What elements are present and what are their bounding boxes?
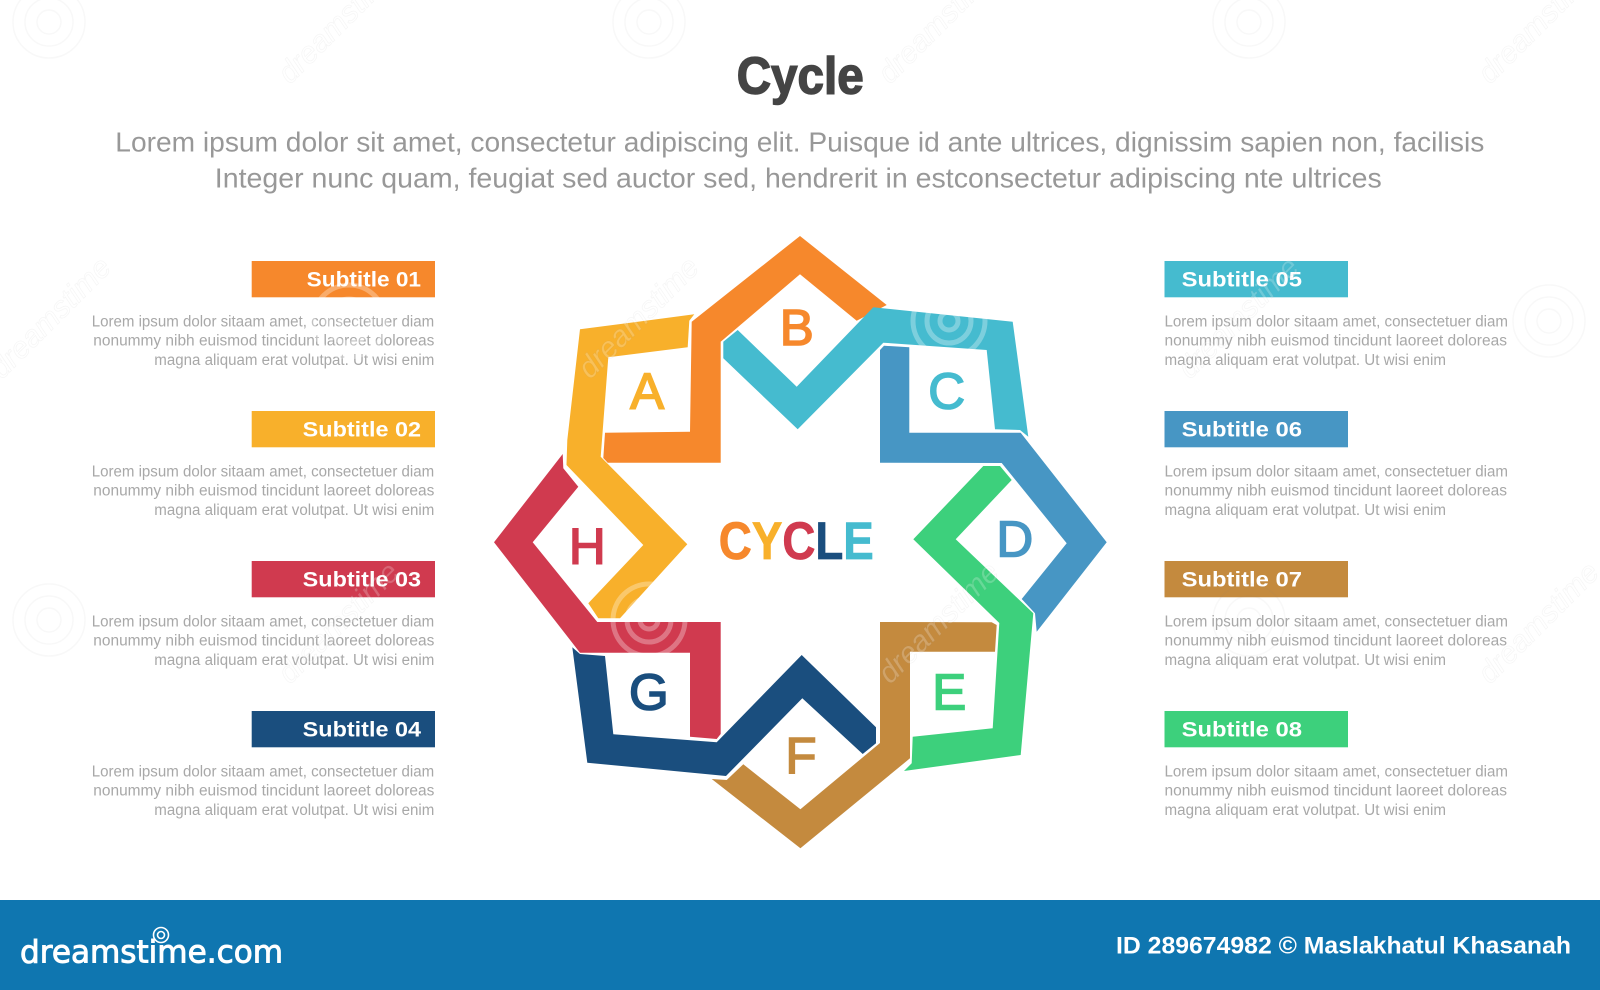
watermark spirals (13, 0, 1585, 656)
letter D: D (996, 511, 1033, 568)
intro text: Integer nunc quam, feugiat sed auctor sed, hendrerit in estconsectetur adipiscing nte ultrices (215, 163, 1382, 194)
subtitle 07 block: magna aliquam erat volutpat. Ut wisi enim (1164, 652, 1446, 669)
segment H: red band (494, 454, 721, 739)
watermark text: dreamstime (572, 251, 706, 385)
subtitle 06 block: Subtitle 06 (1182, 419, 1302, 442)
subtitle 08 block (1164, 711, 1508, 819)
intro text (115, 127, 1484, 194)
subtitle 01 block (92, 261, 435, 369)
footer credit: ID 289674982 © Maslakhatul Khasanah (1116, 932, 1571, 959)
center word CYCLE: CYCLE (719, 512, 874, 571)
footer logo: dreamstime.com (20, 935, 283, 971)
subtitle 08 block: Lorem ipsum dolor sitaam amet, consectetuer diam (1164, 763, 1508, 780)
subtitle 03 block: Lorem ipsum dolor sitaam amet, consectetuer diam (92, 613, 434, 630)
subtitle 02 block (92, 411, 435, 519)
subtitle 03 block (92, 561, 435, 669)
letter G: G (629, 664, 669, 720)
subtitle 06 block: magna aliquam erat volutpat. Ut wisi enim (1164, 502, 1446, 519)
segment C: teal band (723, 307, 1028, 437)
subtitle 04 block: Lorem ipsum dolor sitaam amet, consectetuer diam (92, 763, 434, 780)
subtitle 08 block: Subtitle 08 (1182, 719, 1302, 742)
subtitle 05 block: magna aliquam erat volutpat. Ut wisi enim (1164, 352, 1446, 369)
subtitle 04 block (92, 711, 435, 819)
watermark text (0, 0, 1600, 690)
subtitle 06 block (1164, 411, 1508, 519)
subtitle 06 block: nonummy nibh euismod tincidunt laoreet doloreas (1164, 483, 1507, 500)
subtitle 04 block: Subtitle 04 (303, 719, 421, 742)
subtitle 04 block: magna aliquam erat volutpat. Ut wisi enim (154, 802, 434, 819)
segment B: orange band (603, 236, 887, 463)
segment D: blue band (880, 346, 1107, 632)
segment E: green band (904, 466, 1033, 771)
cycle diagram (494, 236, 1107, 848)
subtitle 01 block: Subtitle 01 (307, 269, 421, 292)
subtitle 05 block: Lorem ipsum dolor sitaam amet, consectetuer diam (1164, 313, 1508, 330)
watermark text: dreamstime (272, 556, 406, 690)
subtitle 03 block: Subtitle 03 (303, 569, 421, 592)
subtitle 08 block: magna aliquam erat volutpat. Ut wisi enim (1164, 802, 1446, 819)
subtitle 07 block: Subtitle 07 (1182, 569, 1302, 592)
watermark text: dreamstime (872, 556, 1006, 690)
subtitle 05 block: nonummy nibh euismod tincidunt laoreet doloreas (1164, 333, 1507, 350)
subtitle 05 block (1164, 261, 1508, 369)
subtitle 01 block: nonummy nibh euismod tincidunt laoreet doloreas (93, 333, 435, 350)
subtitle 02 block: nonummy nibh euismod tincidunt laoreet doloreas (93, 483, 435, 500)
subtitle 06 block: Lorem ipsum dolor sitaam amet, consectetuer diam (1164, 463, 1508, 480)
subtitle 07 block: Lorem ipsum dolor sitaam amet, consectetuer diam (1164, 613, 1508, 630)
title: Cycle (737, 47, 864, 105)
subtitle 05 block: Subtitle 05 (1182, 269, 1302, 292)
right column: subtitles 05-08 (1164, 261, 1508, 819)
footer band (0, 900, 1600, 990)
segment A: yellow band (566, 314, 694, 618)
subtitle 03 block: magna aliquam erat volutpat. Ut wisi enim (154, 652, 434, 669)
subtitle 03 block: nonummy nibh euismod tincidunt laoreet doloreas (93, 633, 435, 650)
left column: subtitles 01-04 (92, 261, 435, 819)
segment F: tan band (712, 622, 997, 848)
subtitle 08 block: nonummy nibh euismod tincidunt laoreet doloreas (1164, 783, 1507, 800)
segment G: navy band (572, 647, 876, 776)
intro text: Lorem ipsum dolor sit amet, consectetur adipiscing elit. Puisque id ante ultrices, dignissim sapien non, facilisis (115, 127, 1484, 158)
subtitle 02 block: Subtitle 02 (303, 419, 421, 442)
subtitle 01 block: magna aliquam erat volutpat. Ut wisi enim (154, 352, 434, 369)
subtitle 04 block: nonummy nibh euismod tincidunt laoreet doloreas (93, 783, 435, 800)
letter A: A (630, 363, 664, 420)
letter F: F (785, 727, 817, 784)
icon: spiral (154, 928, 168, 942)
subtitle 02 block: magna aliquam erat volutpat. Ut wisi enim (154, 502, 434, 519)
subtitle 01 block: Lorem ipsum dolor sitaam amet, consectetuer diam (92, 313, 434, 330)
letter C: C (928, 362, 965, 420)
subtitle 07 block: nonummy nibh euismod tincidunt laoreet doloreas (1164, 633, 1507, 650)
letter B: B (780, 299, 814, 356)
watermark text: dreamstime (1172, 251, 1306, 385)
subtitle 07 block (1164, 561, 1508, 669)
letter E: E (932, 663, 966, 720)
letter H: H (569, 518, 606, 575)
subtitle 02 block: Lorem ipsum dolor sitaam amet, consectetuer diam (92, 463, 434, 480)
